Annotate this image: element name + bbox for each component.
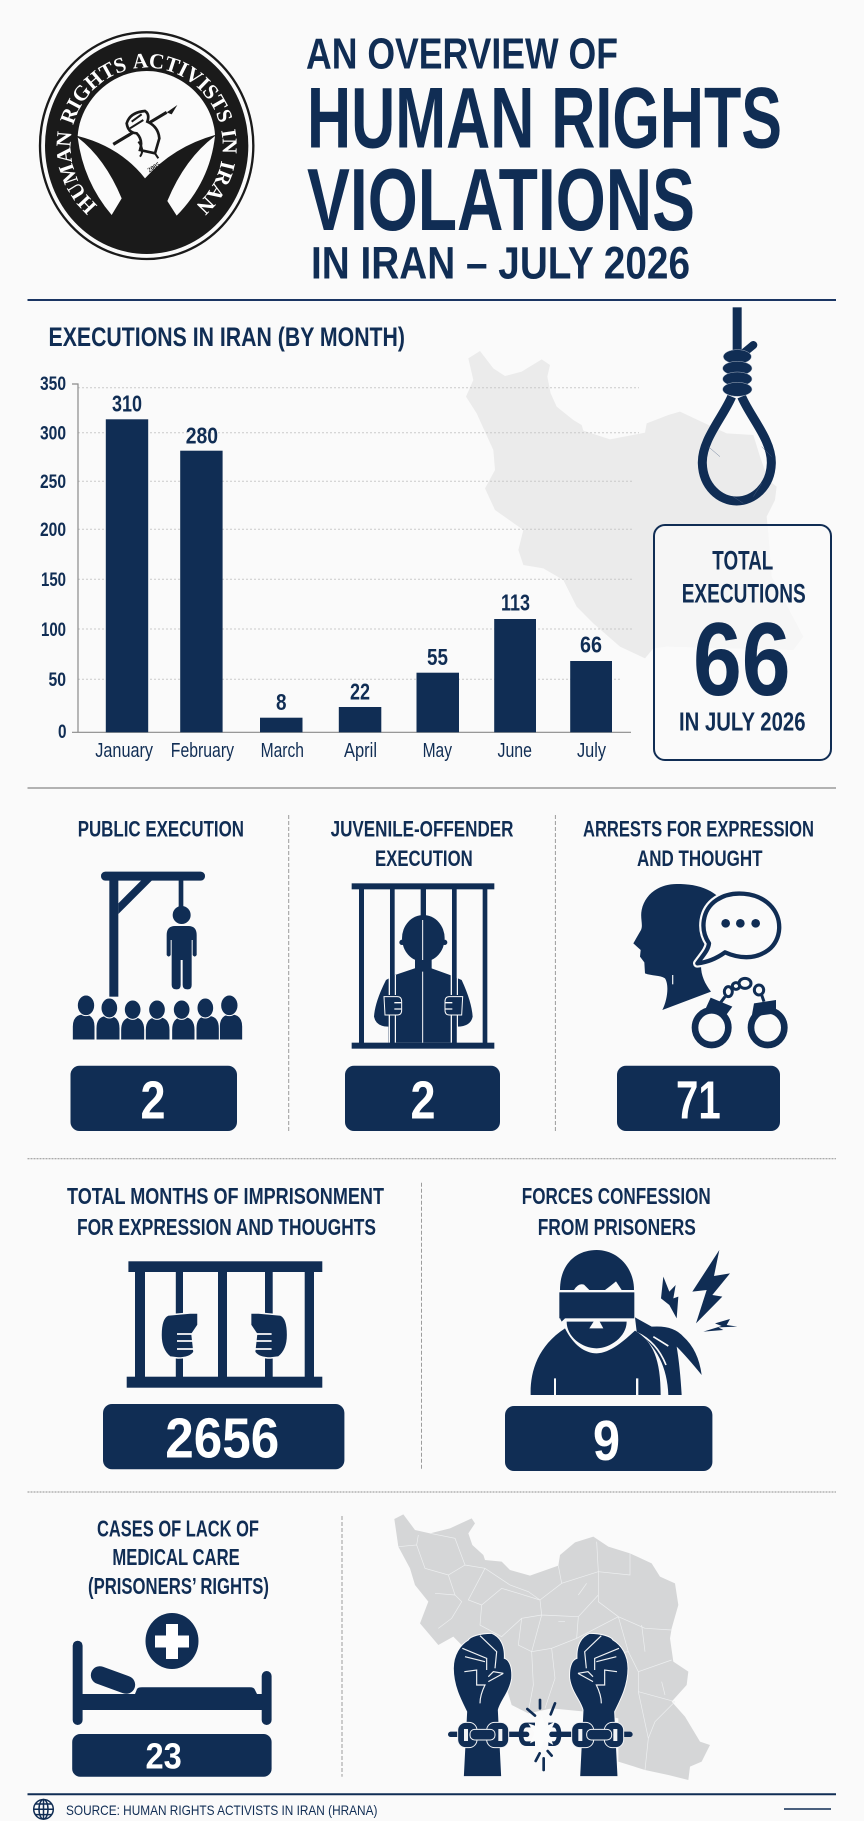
callout: total executions (654, 525, 831, 760)
chain links over wrists (458, 1722, 624, 1748)
callout: total executions: TOTAL (712, 545, 773, 575)
icon: prisoner behind bars (352, 883, 494, 1049)
panel: juvenile-offender execution (331, 817, 514, 1131)
value badge (70, 1066, 237, 1131)
value labels: 280 (186, 422, 218, 448)
icon: globe (34, 1800, 53, 1819)
source text: SOURCE: HUMAN RIGHTS ACTIVISTS IN IRAN (HRANA) (66, 1802, 377, 1818)
y axis labels (40, 374, 66, 743)
icon: gallows and crowd (72, 872, 243, 1040)
month labels (95, 740, 606, 762)
logo: Human Rights Activists in Iran: HUMAN RIGHTS ACTIVISTS IN IRAN (56, 54, 237, 216)
month labels: February (171, 740, 234, 762)
heading (88, 1516, 269, 1599)
bar chart: executions by month (40, 374, 639, 762)
value badge (103, 1404, 344, 1471)
y axis labels: 200 (40, 520, 66, 541)
value badge: 2656 (165, 1407, 279, 1471)
heading: EXECUTION (375, 846, 473, 871)
heading: CASES OF LACK OF (97, 1516, 259, 1542)
value labels: 55 (427, 644, 448, 670)
value badge: 23 (146, 1735, 182, 1776)
heading (67, 1183, 384, 1240)
month labels: April (344, 740, 377, 762)
logo: Human Rights Activists in Iran: 2005 (147, 161, 162, 174)
logo: Human Rights Activists in Iran (38, 31, 254, 260)
heading (522, 1183, 711, 1240)
value labels (112, 391, 602, 715)
month labels: July (577, 740, 606, 762)
title: VIOLATIONS (307, 150, 695, 249)
value badge: 71 (676, 1070, 721, 1130)
y axis labels: 0 (58, 722, 66, 743)
value labels: 310 (112, 391, 142, 417)
panel: public execution (70, 817, 244, 1131)
icon: jail bars with fists (127, 1261, 322, 1388)
footer: source (34, 1800, 377, 1819)
month labels: May (423, 740, 452, 762)
month labels: June (498, 740, 532, 762)
value labels: 113 (501, 590, 530, 616)
chart heading: EXECUTIONS IN IRAN (BY MONTH) (48, 322, 405, 352)
month labels: March (261, 740, 304, 762)
heading: FROM PRISONERS (538, 1214, 696, 1240)
value badge: 9 (593, 1409, 620, 1473)
icon: raised fist right (570, 1633, 628, 1777)
value badge (72, 1734, 272, 1777)
month labels: January (95, 740, 153, 762)
callout: total executions: EXECUTIONS (682, 579, 806, 609)
y axis labels: 100 (41, 620, 66, 641)
y axis labels: 150 (41, 570, 66, 591)
value labels: 22 (350, 678, 370, 704)
icon: blindfolded prisoner with lightning (531, 1250, 737, 1395)
title: IN IRAN – JULY 2026 (311, 238, 690, 289)
y axis labels: 300 (40, 424, 66, 444)
map: Iran (394, 1514, 710, 1780)
bars (106, 419, 612, 732)
heading: JUVENILE-OFFENDER (331, 817, 514, 842)
heading (331, 817, 514, 871)
heading: FOR EXPRESSION AND THOUGHTS (77, 1214, 376, 1240)
title (306, 30, 782, 289)
icon: head, speech bubble and handcuffs (633, 884, 784, 1045)
icon: raised fist left (453, 1633, 512, 1777)
panel: months of imprisonment (67, 1183, 384, 1471)
heading (583, 817, 814, 871)
panel: lack of medical care (72, 1516, 272, 1777)
icon: hospital bed with cross (73, 1613, 272, 1725)
value badge (345, 1066, 500, 1131)
panel: arrests for expression and thought (583, 817, 814, 1131)
panel: forced confession (505, 1183, 737, 1473)
title: AN OVERVIEW OF (306, 30, 618, 78)
value badge (505, 1406, 712, 1473)
heading: TOTAL MONTHS OF IMPRISONMENT (67, 1183, 384, 1209)
y axis labels: 350 (40, 374, 66, 395)
icon: chain break sparks (527, 1700, 555, 1770)
heading: PUBLIC EXECUTION (78, 817, 244, 842)
heading: AND THOUGHT (637, 846, 763, 871)
y axis labels: 250 (40, 472, 66, 493)
y axis labels: 50 (48, 670, 66, 691)
heading: (PRISONERS’ RIGHTS) (88, 1573, 269, 1599)
heading: FORCES CONFESSION (522, 1183, 711, 1209)
value badge (617, 1066, 780, 1131)
map of Iran with provinces and breaking chains (394, 1514, 710, 1780)
background map of Iran behind chart (466, 351, 803, 658)
value badge: 2 (140, 1070, 166, 1130)
value labels: 8 (276, 689, 287, 715)
heading: MEDICAL CARE (112, 1544, 240, 1570)
value badge: 2 (410, 1070, 436, 1130)
callout: total executions: IN JULY 2026 (679, 707, 806, 737)
icon: noose (702, 307, 772, 503)
value labels: 66 (580, 632, 602, 658)
icon: broken chain (451, 1726, 630, 1742)
callout: total executions: 66 (693, 602, 791, 718)
